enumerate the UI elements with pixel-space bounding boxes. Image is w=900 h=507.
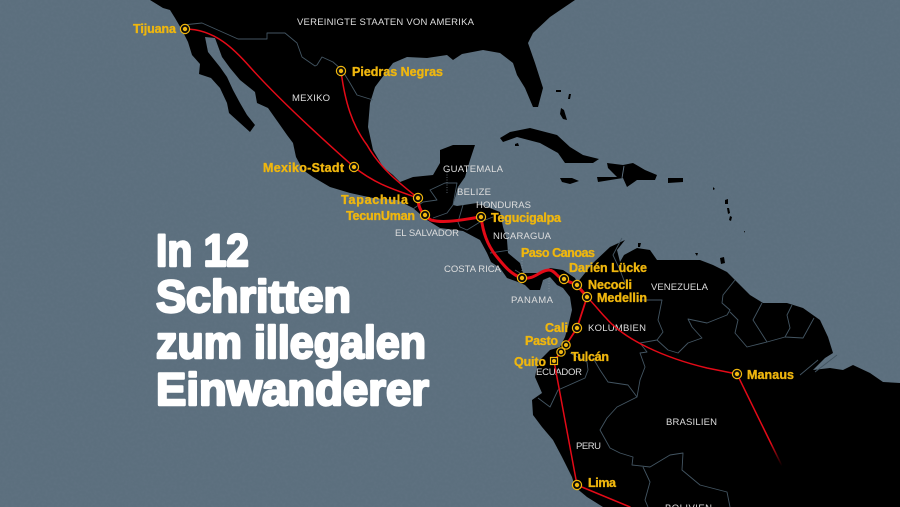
marker: Piedras Negras: [336, 66, 346, 76]
city labels: Necocli: [588, 278, 632, 292]
country labels: BELIZE: [457, 187, 491, 198]
route: Medellin to Quito: [554, 297, 587, 361]
island: Puerto Rico: [668, 178, 683, 183]
title: Schritten: [156, 271, 351, 322]
country labels: KOLUMBIEN: [588, 323, 646, 334]
country labels: VEREINIGTE STAATEN VON AMERIKA: [297, 17, 475, 28]
leader lines: [447, 172, 549, 293]
country labels: BRASILIEN: [666, 417, 717, 428]
city labels: Tulcán: [571, 350, 609, 364]
city labels: Tapachula: [341, 193, 409, 207]
city labels: TecunUman: [346, 209, 415, 223]
route: Tijuana to Tapachula: [185, 29, 418, 198]
city labels: Tijuana: [133, 22, 177, 36]
country labels: GUATEMALA: [443, 164, 504, 175]
country labels: HONDURAS: [476, 200, 531, 211]
route: Quito to Lima and beyond: [554, 361, 630, 507]
marker: Quito: [550, 358, 558, 364]
country labels: PANAMA: [511, 295, 554, 306]
city labels: Darién Lücke: [569, 261, 647, 275]
title: zum illegalen: [156, 317, 426, 368]
marker: Tijuana: [180, 24, 190, 34]
city labels: Lima: [588, 476, 617, 490]
marker: Tegucigalpa: [476, 212, 486, 222]
route: Manaus southwards, fading out: [737, 374, 782, 466]
marker: Pasto: [562, 341, 570, 349]
city labels: Pasto: [525, 334, 558, 348]
routes: red migration path: [185, 29, 782, 507]
country labels: NICARAGUA: [493, 231, 552, 242]
island: Hispaniola: [597, 163, 657, 187]
small islands: [515, 90, 745, 264]
city labels: Manaus: [747, 368, 794, 382]
route: Tapachula to Paso Canoas to Medellin: [418, 198, 587, 297]
city labels: Mexiko-Stadt: [263, 161, 345, 175]
country labels: VENEZUELA: [651, 282, 709, 293]
marker: Medellin: [582, 292, 592, 302]
city labels: Cali: [545, 321, 568, 335]
country labels: ECUADOR: [536, 367, 582, 378]
marker: Cali: [572, 323, 582, 333]
marker: Necocli: [572, 280, 582, 290]
marker: Mexiko-Stadt: [349, 162, 359, 172]
marker: Darién Lücke: [559, 274, 569, 284]
island: Cuba: [500, 128, 599, 163]
title: [156, 225, 429, 415]
map: country borders: [183, 23, 837, 507]
marker: Tulcán: [557, 348, 565, 356]
marker: Manaus: [732, 369, 742, 379]
city labels: [133, 22, 794, 490]
country labels: PERU: [576, 441, 601, 452]
country labels: COSTA RICA: [444, 264, 502, 275]
island: Jamaica: [560, 178, 579, 184]
title: Einwanderer: [156, 364, 429, 415]
marker: Paso Canoas: [517, 273, 527, 283]
country labels: EL SALVADOR: [395, 228, 459, 239]
marker: Tapachula: [413, 193, 423, 203]
city labels: Medellin: [597, 291, 647, 305]
country labels: MEXIKO: [292, 93, 330, 104]
city labels: Quito: [514, 355, 546, 369]
city labels: Piedras Negras: [352, 65, 443, 79]
marker: Lima: [572, 480, 582, 490]
city labels: Tegucigalpa: [491, 211, 562, 225]
marker: TecunUman: [420, 210, 430, 220]
title: In 12: [156, 225, 249, 276]
city labels: Paso Canoas: [521, 246, 595, 260]
country labels: [292, 17, 717, 507]
route: Medellin to Manaus: [587, 297, 737, 374]
route markers: [180, 24, 742, 490]
route: Piedras Negras to Tapachula: [341, 71, 418, 198]
